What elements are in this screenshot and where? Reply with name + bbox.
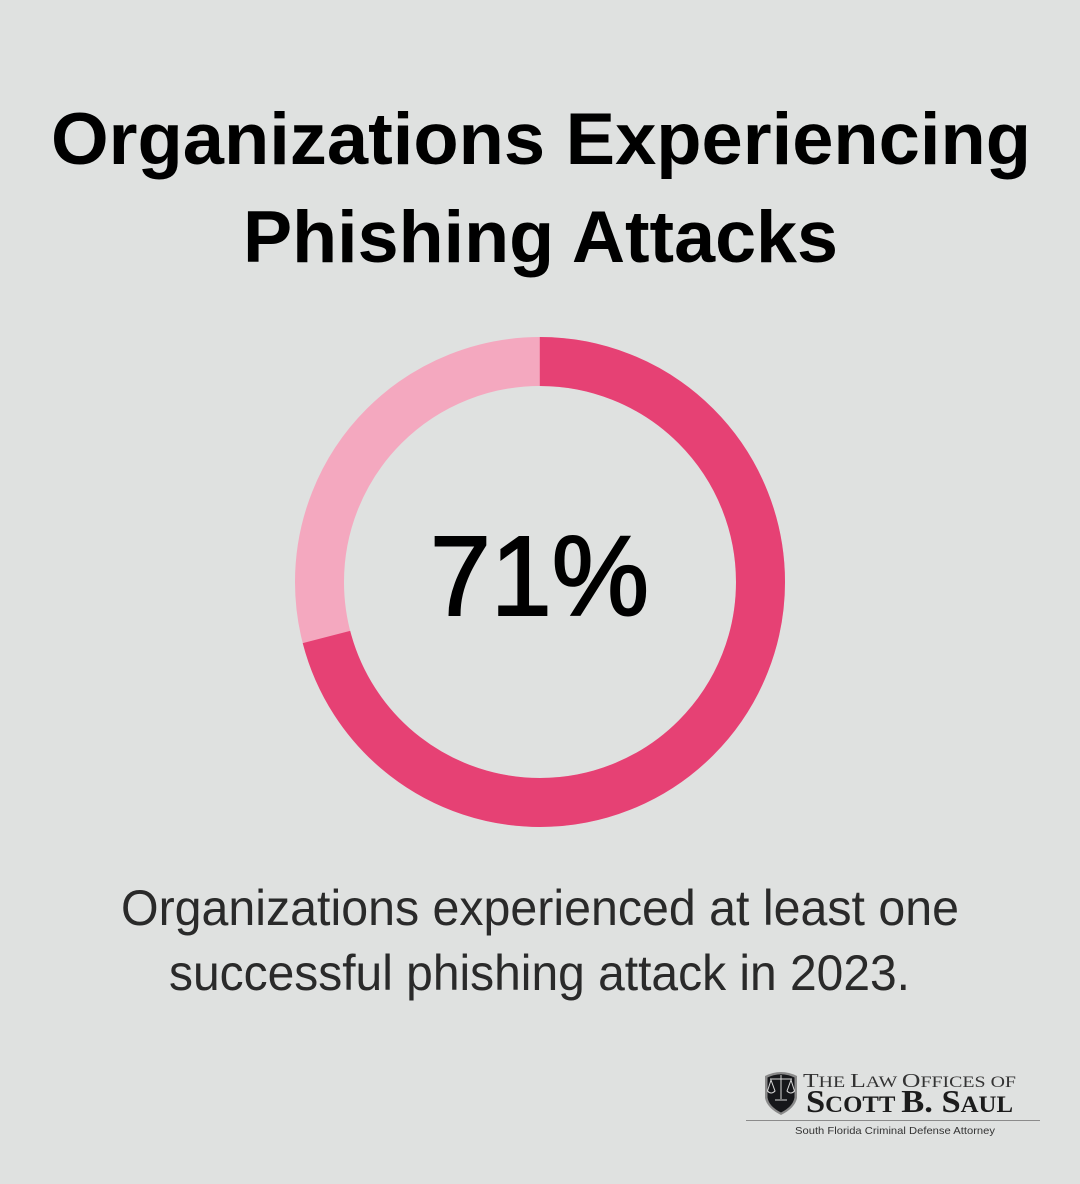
donut value: 71%	[430, 513, 649, 639]
logo firm line 1: THE LAW O FFICES OF	[803, 1070, 1016, 1092]
title: Phishing Attacks	[243, 197, 838, 278]
logo firm line 2: SCOTT B. SAUL	[806, 1083, 1013, 1119]
logo divider	[746, 1120, 1040, 1121]
title	[51, 99, 1031, 278]
description text: Organizations experienced at least one	[121, 880, 959, 936]
logo: The Law Offices of Scott B. Saul	[746, 1070, 1040, 1137]
logo tagline: South Florida Criminal Defense Attorney	[795, 1125, 996, 1137]
description text: successful phishing attack in 2023.	[169, 945, 910, 1001]
icon: shield with scales	[765, 1072, 797, 1115]
description text	[121, 880, 959, 1001]
donut chart: 71 percent	[320, 362, 760, 802]
title: Organizations Experiencing	[51, 99, 1031, 180]
